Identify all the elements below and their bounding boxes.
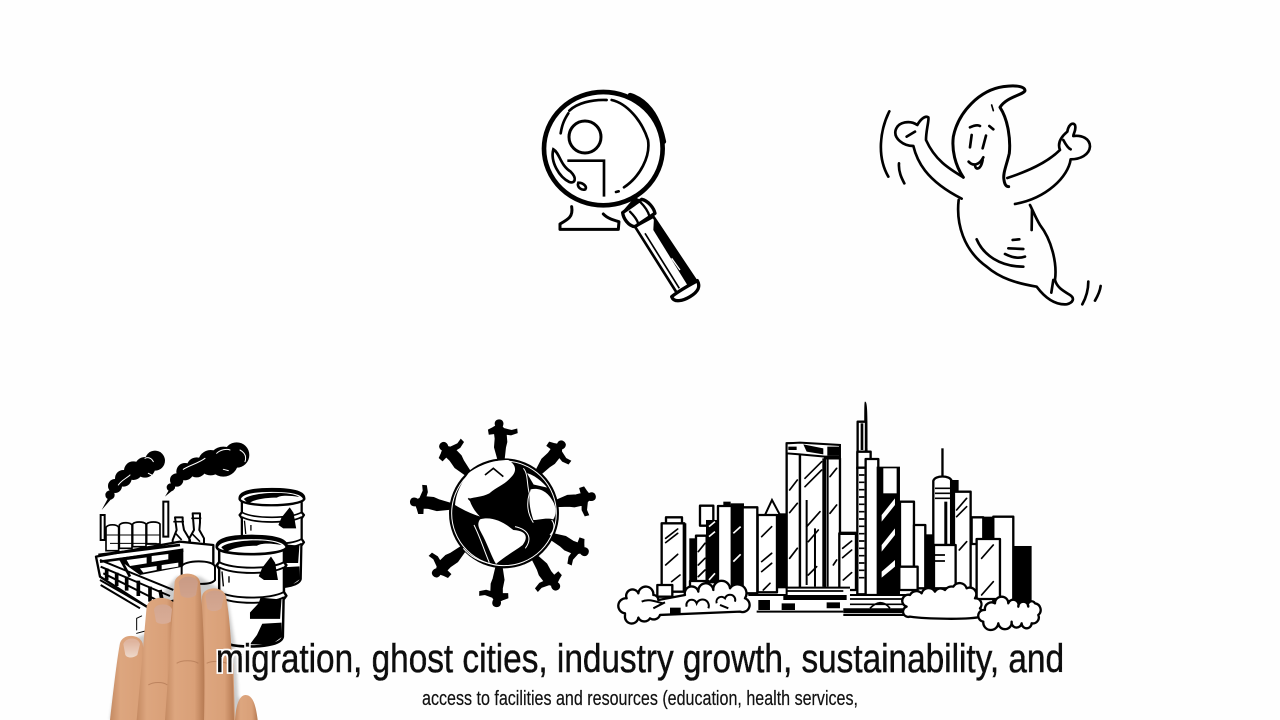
thumb [235, 695, 258, 720]
ghost head and outline [953, 86, 1025, 187]
continent: South America [478, 518, 526, 564]
illustration: city skyline [618, 402, 1041, 630]
lens [544, 92, 663, 205]
base of stand [560, 207, 619, 229]
globe [449, 458, 559, 568]
little finger [110, 636, 152, 720]
lens inner arcs [561, 100, 648, 192]
storage tanks [106, 522, 160, 551]
back black blocks [689, 402, 1032, 603]
smoke highlights [118, 449, 246, 485]
finger nails [123, 577, 224, 657]
middle finger [165, 574, 204, 720]
lens highlight [553, 149, 586, 190]
lens figure: circle and bracket [569, 121, 601, 153]
icon: ghost [881, 86, 1101, 304]
refinery deck [96, 542, 213, 607]
handle cap [672, 281, 699, 301]
skyscrapers left [666, 517, 682, 525]
icon: factory and oil barrels [96, 442, 304, 720]
ring finger [137, 598, 177, 720]
window reflections [666, 462, 993, 595]
street level [748, 588, 910, 613]
ghost left arm [895, 117, 963, 199]
continent: Africa and Europe [529, 489, 556, 520]
main tower [787, 443, 800, 588]
chimneys [101, 502, 168, 540]
ghost right arm [1007, 124, 1090, 204]
caption line 1: migration, ghost cities, industry growth, sustainability, and [216, 637, 1064, 681]
handle [635, 217, 696, 293]
handle ferrule [623, 198, 640, 213]
palm [112, 663, 235, 720]
continent: North America [455, 460, 515, 517]
icon: magnifying glass [544, 92, 699, 301]
smoke cloud left [102, 451, 165, 510]
icon: globe with people [409, 420, 598, 608]
oil barrel front [216, 536, 287, 646]
caption line 2: access to facilities and resources (education, health services, [422, 688, 858, 710]
commerzbank style tower [858, 422, 866, 458]
smoke cloud right [165, 442, 249, 497]
left trees [618, 581, 750, 624]
sketched pen line [137, 616, 147, 633]
globe shoreline [463, 548, 492, 564]
finger creases [148, 661, 228, 685]
ghost motion lines [881, 111, 1101, 304]
right trees [902, 583, 982, 619]
hand shadow [110, 577, 257, 720]
right towers [900, 502, 914, 568]
ghost face [969, 125, 993, 168]
distillation towers [173, 513, 204, 550]
hand [110, 574, 258, 720]
index finger [197, 588, 234, 720]
round tank [182, 561, 215, 584]
ghost body [958, 200, 1073, 304]
oil barrel back [239, 489, 304, 588]
people around the globe [409, 420, 598, 608]
